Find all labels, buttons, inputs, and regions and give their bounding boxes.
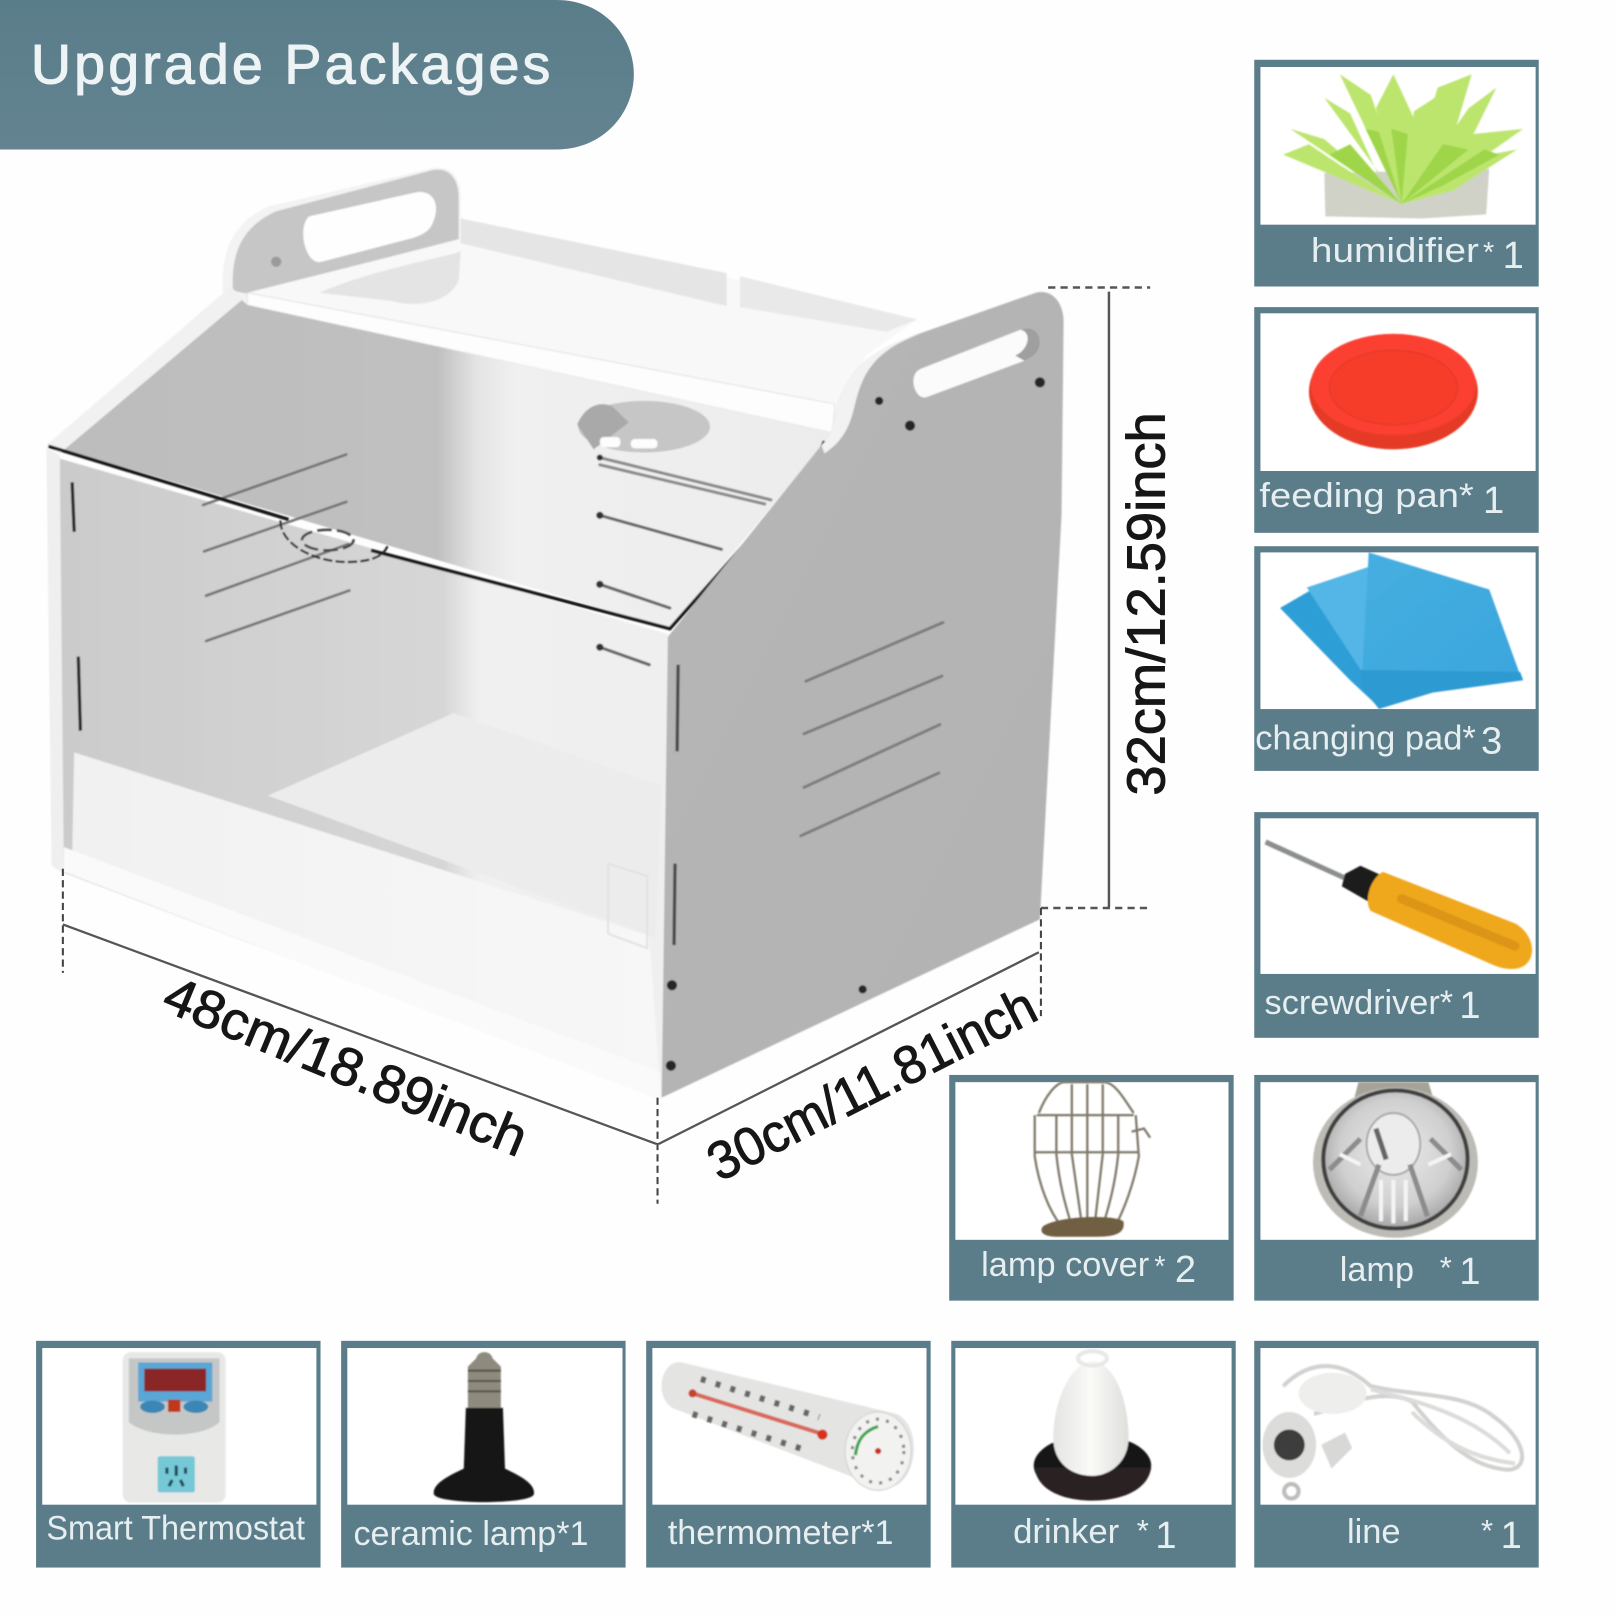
label: lamp: 1 [1459,1250,1481,1293]
product illustration: enclosure cabinet [46,168,1064,1101]
icon: reflector lamp [1313,1082,1478,1238]
label: line: line [1347,1513,1401,1551]
icon: drinker [1034,1351,1151,1501]
panel: thermometer [646,1341,931,1568]
icon: thermostat [123,1352,226,1503]
dimension: width: 48cm/18.89inch [155,965,536,1168]
label: drinker: 1 [1155,1514,1177,1557]
label: drinker: drinker [1013,1513,1119,1551]
label: humidifier [1311,232,1524,277]
lower lamp hole outline [280,520,388,562]
label: smart thermostat: Smart Thermostat [46,1510,306,1548]
label: ceramic lamp: ceramic lamp*1 [354,1515,588,1553]
front left post [46,447,64,874]
title banner [0,0,634,149]
panel: drinker [951,1341,1236,1568]
icon: screwdriver [1266,842,1532,969]
dimension: depth: 30cm/11.81inch [698,976,1046,1193]
lid front edge line [48,441,824,629]
floor inside [268,713,662,938]
side vent slots [801,622,943,836]
label: thermometer: thermometer*1 [668,1514,894,1552]
label: humidifier: * [1483,237,1494,269]
side joint slots [674,665,678,945]
icon: humidifier [1283,74,1523,218]
front left vent slots [203,454,349,641]
right side panel [662,292,1064,1098]
right inner vent slots [596,454,771,665]
label: line: * [1481,1513,1493,1548]
icon: ceramic lamp [434,1352,534,1502]
dimension: depth [659,908,1046,1193]
panel: ceramic lamp [341,1341,626,1568]
label: changing pad: changing pad* [1255,719,1476,757]
label: line: 1 [1501,1514,1522,1557]
lid left edge [46,287,243,453]
side panel bright edge [821,334,920,453]
label: screwdriver: screwdriver* [1265,984,1453,1022]
label: lamp [1340,1250,1481,1293]
top shelf and rails [247,218,917,433]
panel: feeding pan [1254,307,1539,533]
icon: wire lamp cage [1035,1082,1150,1237]
label: lamp cover [981,1246,1196,1291]
panel: lamp [1254,1075,1539,1301]
icon: thermometer [662,1362,914,1490]
title banner: Upgrade Packages [31,33,550,95]
label: screwdriver: 1 [1459,984,1481,1027]
icon: feeding pan [1309,334,1478,449]
label: humidifier: 1 [1503,234,1524,277]
label: lamp cover: * [1154,1251,1166,1283]
label: drinker: * [1137,1513,1149,1548]
front clear panel [60,459,668,1100]
front vertical slots [72,482,80,731]
panel: smart thermostat [36,1341,321,1568]
label: feeding pan: feeding pan* [1259,477,1474,515]
icon: changing pads [1280,552,1523,709]
latch square [608,864,647,948]
label: drinker [1013,1513,1177,1557]
panel: screwdriver [1254,812,1539,1038]
label: lamp: lamp [1340,1251,1414,1289]
inner lamp hole [577,401,710,452]
label: line [1347,1513,1522,1557]
screw holes [666,377,1045,1071]
back left handle [222,168,461,309]
bottom base [64,847,662,1101]
dimension: height: 32cm/12.59inch [1117,412,1177,796]
label: humidifier: humidifier [1311,232,1479,270]
label: lamp: * [1440,1250,1452,1285]
front lip [72,752,660,1080]
dimension: width [63,869,658,1204]
panel: humidifier [1254,60,1539,287]
label: feeding pan: 1 [1483,479,1504,522]
label: lamp cover: lamp cover [981,1246,1149,1284]
side handle slot [913,328,1040,397]
label: feeding pan [1259,477,1504,522]
icon: power cord [1262,1366,1522,1499]
panel: lamp cover [949,1075,1234,1301]
panel: line [1254,1341,1539,1568]
sloped clear lid [49,294,833,629]
label: changing pad: 3 [1481,719,1502,762]
panel: changing pad [1254,546,1539,771]
label: lamp cover: 2 [1175,1248,1196,1291]
